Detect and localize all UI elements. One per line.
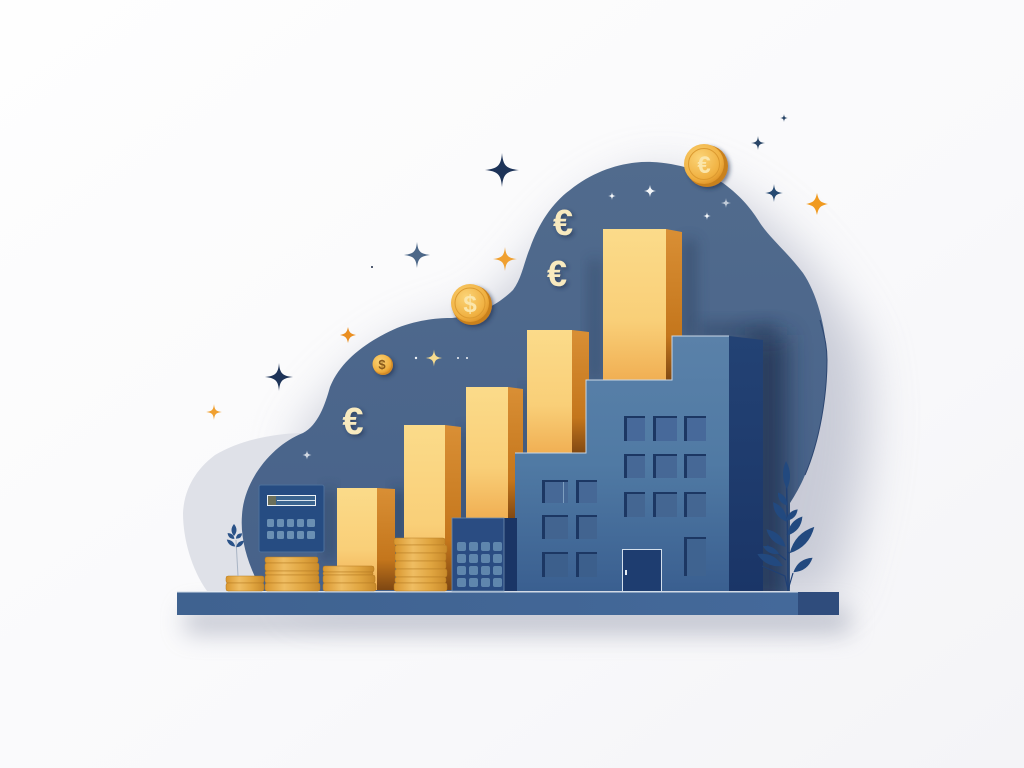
sparkles: light on panel: [302, 185, 731, 460]
coin stack A: [226, 576, 264, 591]
bar 3: [466, 387, 523, 520]
coin: dollar small: $: [378, 357, 386, 372]
coin stack B: [265, 557, 320, 591]
euro sign left: €: [342, 401, 364, 443]
windows: upper block: [624, 416, 706, 576]
grey back blob: [183, 433, 320, 591]
sparkles: orange: [206, 193, 828, 420]
coin: dollar small: [372, 354, 393, 375]
windows: lower block: [542, 480, 597, 577]
bar 1: [337, 488, 395, 590]
door: [622, 550, 662, 592]
bar 4: [527, 330, 589, 455]
coin: euro top: [684, 144, 728, 187]
cloud drop shadow: [300, 175, 868, 600]
navy cloud panel: [242, 162, 827, 605]
coin: dollar mid: $: [463, 291, 477, 318]
plant right: [755, 461, 818, 591]
illustration: finance growth scene: [173, 114, 899, 653]
plant left: [226, 524, 245, 576]
euro sign lower: €: [547, 253, 567, 294]
bar 5: [603, 229, 682, 382]
coin stack D: [394, 538, 447, 591]
building: [515, 336, 763, 592]
shelf shadow: [185, 608, 850, 634]
coin: euro top: €: [697, 152, 711, 179]
euro sign upper: €: [553, 202, 573, 243]
shelf: [177, 592, 839, 615]
bar 2: [404, 425, 461, 590]
coin: dollar mid: [451, 284, 492, 325]
small calculator: [452, 518, 517, 591]
large calculator: [259, 485, 324, 552]
sparkles: navy and slate: [265, 114, 788, 391]
coin stack C: [323, 566, 376, 591]
